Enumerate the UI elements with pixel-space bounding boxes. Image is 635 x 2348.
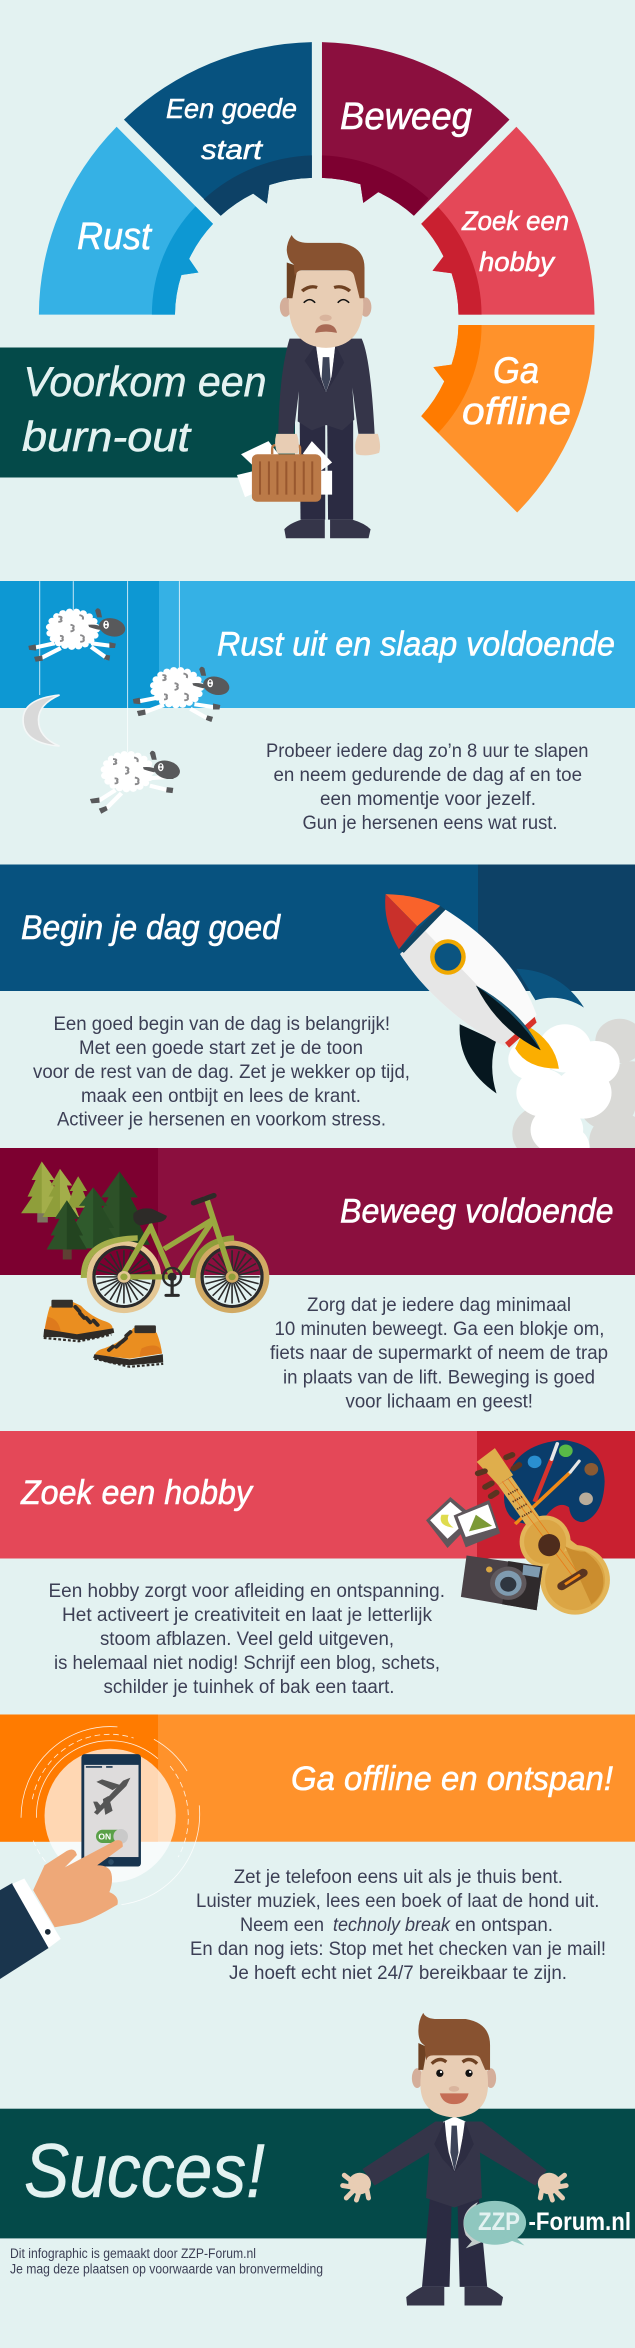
body text	[33, 1014, 410, 1130]
semicircle gauge	[39, 42, 595, 512]
logo: ZZP-Forum.nl	[463, 2201, 631, 2248]
body text: fiets naar de supermarkt of neem de trap	[270, 1343, 608, 1364]
panel: zoek een hobby	[0, 1431, 635, 1698]
character: happy businessman with open arms	[343, 2013, 566, 2305]
illustration: hand tapping phone in airplane mode	[0, 1727, 200, 1979]
gauge labels: Beweeg	[340, 96, 472, 138]
illustration: trees, bicycle and boots	[21, 1161, 266, 1367]
illustration: sheep and moon	[23, 581, 232, 814]
icon: trees	[21, 1161, 150, 1259]
footer credit: Dit infographic is gemaakt door ZZP-Forum.nl	[10, 2246, 256, 2261]
heading: Ga offline en ontspan!	[291, 1760, 614, 1798]
body text: stoom afblazen. Veel geld uitgeven,	[100, 1629, 394, 1650]
panel: begin je dag goed	[0, 864, 635, 1169]
gauge segment: een goede start	[124, 42, 312, 216]
gauge labels: hobby	[479, 247, 556, 277]
heading: Zoek een hobby	[20, 1474, 254, 1512]
body text	[266, 741, 588, 834]
section band	[0, 1431, 635, 1558]
gauge labels: start	[201, 134, 263, 165]
icon: hiking boots	[43, 1300, 163, 1367]
illustration: palette, guitar, photos and camera	[426, 1440, 610, 1615]
panel: rust uit en slaap voldoende	[0, 581, 635, 834]
body text: Zet je telefoon eens uit als je thuis bent.	[234, 1867, 563, 1888]
gauge segment: ga offline	[421, 325, 595, 512]
body text: Neem een	[240, 1915, 324, 1936]
section band	[0, 1148, 635, 1275]
icon: guitar	[477, 1448, 610, 1615]
gauge labels: Ga	[493, 350, 539, 391]
title banner	[0, 348, 295, 478]
icon: camera	[461, 1555, 543, 1610]
gauge labels: offline	[462, 391, 571, 433]
gauge segment: zoek een hobby	[421, 127, 595, 315]
body text: Het activeert je creativiteit en laat je letterlijk	[62, 1605, 432, 1626]
gauge segment: rust	[39, 127, 213, 315]
body text	[48, 1581, 445, 1698]
icon: bicycle	[84, 1195, 266, 1311]
body text: voor lichaam en geest!	[346, 1392, 533, 1412]
body text: maak een ontbijt en lees de krant.	[81, 1086, 361, 1107]
section band	[0, 864, 635, 991]
panel: ga offline en ontspan	[0, 1714, 635, 1984]
body text: en ontspan.	[455, 1915, 553, 1936]
panel: succes closing	[0, 2013, 635, 2305]
body text: in plaats van de lift. Beweging is goed	[283, 1368, 595, 1388]
body text: en neem gedurende de dag af en toe	[274, 765, 582, 786]
body text: Een hobby zorgt voor afleiding en ontspanning.	[48, 1581, 445, 1602]
gauge segment: beweeg	[322, 42, 509, 216]
body text: een momentje voor jezelf.	[320, 789, 536, 810]
heading: Rust uit en slaap voldoende	[217, 626, 615, 664]
body text: En dan nog iets: Stop met het checken van je mail!	[190, 1939, 606, 1960]
heading: Begin je dag goed	[21, 909, 281, 947]
body text: Je hoeft echt niet 24/7 bereikbaar te zijn.	[229, 1963, 567, 1984]
body text: Probeer iedere dag zo’n 8 uur te slapen	[266, 741, 588, 762]
gauge labels: Zoek een	[461, 206, 569, 236]
title banner: burn-out	[22, 413, 192, 460]
footer credit: Je mag deze plaatsen op voorwaarde van bronvermelding	[10, 2262, 323, 2276]
logo: ZZP-Forum.nl: ZZP	[478, 2208, 520, 2236]
section band	[0, 1714, 635, 1842]
body text: 10 minuten beweegt. Ga een blokje om,	[274, 1319, 604, 1340]
body text: Zorg dat je iedere dag minimaal	[307, 1295, 571, 1316]
heading: Beweeg voldoende	[340, 1192, 614, 1230]
gauge labels: Een goede	[166, 93, 297, 124]
body text: schilder je tuinhek of bak een taart.	[104, 1677, 394, 1698]
closing banner	[0, 2109, 635, 2238]
gauge labels	[77, 93, 571, 433]
icon: paint palette	[504, 1440, 605, 1524]
body text: Luister muziek, lees een boek of laat de hond uit.	[196, 1891, 599, 1912]
illustration: rocket and smoke cloud	[385, 894, 635, 1169]
character: stressed businessman with briefcase	[237, 235, 380, 538]
body text: Activeer je hersenen en voorkom stress.	[57, 1110, 386, 1130]
body text: Gun je hersenen eens wat rust.	[302, 813, 558, 834]
body text: technoly break	[333, 1915, 451, 1936]
body text: is helemaal niet nodig! Schrijf een blog, schets,	[54, 1653, 440, 1674]
footer credit	[10, 2246, 323, 2276]
body text: Met een goede start zet je de toon	[79, 1038, 363, 1059]
title banner: Voorkom een	[24, 358, 266, 405]
body text	[190, 1867, 606, 1984]
panel: beweeg voldoende	[0, 1148, 635, 1412]
body text: voor de rest van de dag. Zet je wekker op tijd,	[33, 1062, 410, 1083]
illustration: hand tapping phone in airplane mode: ON	[98, 1831, 111, 1841]
body text	[270, 1295, 608, 1412]
panel: header	[0, 42, 595, 538]
section band	[0, 581, 635, 708]
heading: succes: Succes!	[24, 2129, 265, 2214]
gauge labels: Rust	[77, 216, 152, 258]
icon: photos	[426, 1497, 500, 1548]
body text: Een goed begin van de dag is belangrijk!	[54, 1014, 390, 1035]
